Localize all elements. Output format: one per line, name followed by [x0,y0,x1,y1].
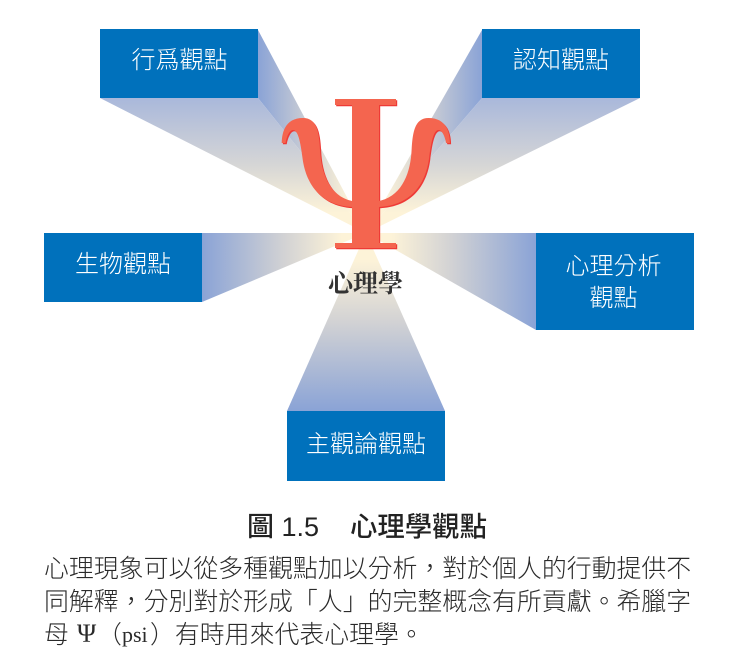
panel: psychoanalytic perspective: 觀點 [590,278,638,313]
panel: psychoanalytic perspective: 心理分析 [566,246,662,281]
icon: psi symbol [282,99,451,249]
caption text block: 心理現象可以從多種觀點加以分析，對於個人的行動提供不 [44,549,691,585]
panel: behavioral perspective [100,29,258,98]
panel: biological perspective: 生物觀點 [75,244,171,279]
caption text block: ）有時用來代表心理學。 [150,615,424,651]
panel: biological perspective [44,233,202,302]
caption text block: 母 [44,615,69,651]
caption text block: Ψ [77,619,97,648]
caption text block: （ [97,615,122,651]
light beams converging on the psi symbol [100,30,640,411]
figure title text: 心理學觀點 [350,504,487,544]
panel: cognitive perspective: 認知觀點 [513,40,609,75]
figure title: 圖 1.5 [247,512,319,542]
panel: subjective perspective [287,411,445,481]
center label: psychology: 心理學 [328,264,403,300]
caption text block [44,549,691,651]
caption text block: psi [122,622,148,647]
panel: cognitive perspective [482,29,640,98]
panel: psychoanalytic perspective [536,233,694,330]
panel: subjective perspective: 主觀論觀點 [306,424,426,459]
panel: behavioral perspective: 行爲觀點 [132,40,228,75]
caption text block: 同解釋，分別對於形成「人」的完整概念有所貢獻。希臘字 [44,582,691,618]
